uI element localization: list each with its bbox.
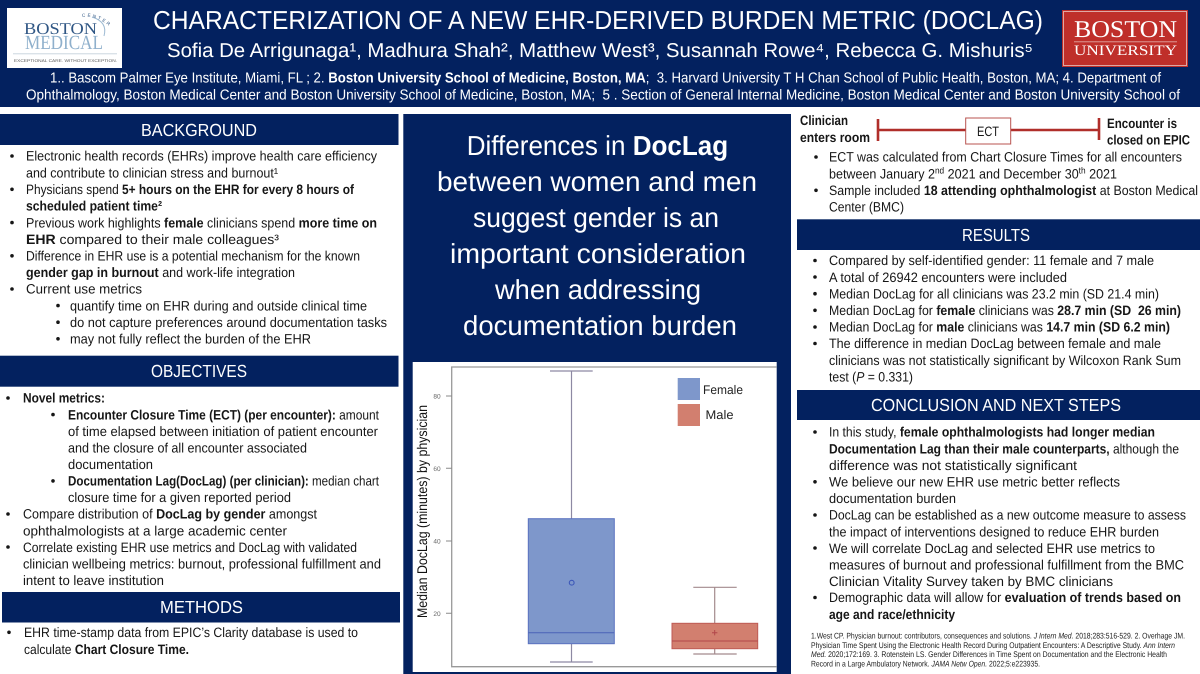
box: male	[672, 587, 758, 654]
text block: conclusion bullets: Documentation Lag than their male counterparts, although the	[829, 441, 1179, 456]
text block: conclusion bullets: We believe our new EHR use metric better reflects	[829, 474, 1120, 490]
y axis ticks and labels: 40	[433, 538, 441, 546]
diagram: encounter closure time: enters room	[800, 130, 870, 145]
diagram: encounter closure time: Encounter is	[1107, 116, 1177, 131]
text block: sample bullets: between January 2nd 2021 and December 30th 2021	[829, 165, 1117, 181]
text block: objectives bullets: ophthalmologists at a large academic center	[23, 523, 287, 538]
heading: background: BACKGROUND	[141, 120, 257, 140]
references: 1.West CP. Physician burnout: contributors, consequences and solutions. J Intern Med. 2018;283:516-529. 2. Overhage JM.	[811, 632, 1185, 640]
text block: results bullets: Median DocLag for male clinicians was 14.7 min (SD 6.2 min)	[829, 320, 1170, 335]
y axis ticks and labels: 20	[433, 611, 441, 618]
text block: background bullets: Physicians spend 5+ hours on the EHR for every 8 hours of	[26, 182, 354, 197]
text block: conclusion bullets: documentation burden	[829, 491, 956, 506]
panel: ECT diagram and sample	[800, 113, 1198, 215]
text block: conclusion bullets: age and race/ethnicity	[829, 607, 955, 622]
heading: background	[0, 114, 398, 145]
heading: conclusion and next steps	[797, 390, 1200, 420]
text block: background bullets: quantify time on EHR during and outside clinical time	[70, 298, 367, 313]
panel: conclusion and next steps	[797, 390, 1200, 622]
affiliations: 1.. Bascom Palmer Eye Institute, Miami, FL ; 2. Boston University School of Medicine, Boston, MA; 3. Harvard University T H Chan School of Public Health, Boston, MA; 4. Department of	[50, 70, 1162, 86]
legend: Female	[703, 383, 743, 397]
text block: background bullets: scheduled patient time²	[26, 199, 162, 214]
heading: results: RESULTS	[962, 225, 1030, 245]
text block: conclusion bullets: the impact of interventions designed to reduce EHR burden	[829, 524, 1159, 539]
text block: conclusion bullets: We will correlate DocLag and selected EHR use metrics to	[829, 541, 1155, 556]
text block: conclusion bullets: measures of burnout and professional fulfillment from the BMC	[829, 558, 1184, 572]
text block: objectives bullets	[6, 391, 381, 588]
logo: Boston Medical Center	[7, 8, 122, 68]
key message: important consideration	[450, 238, 746, 269]
authors: Sofia De Arrigunaga¹, Madhura Shah², Matthew West³, Susannah Rowe⁴, Rebecca G. Mishuris⁵	[167, 40, 1033, 62]
logo: Boston University: BOSTON	[1074, 17, 1177, 43]
diagram: encounter closure time: Clinician	[800, 113, 848, 128]
y axis title: Median DocLag (minutes) by physician	[414, 405, 430, 618]
text block: methods bullet	[7, 625, 358, 657]
logo: Boston Medical Center: EXCEPTIONAL CARE. WITHOUT EXCEPTION.	[14, 58, 117, 63]
references: Physician Time Spent Using the Electronic Health Record During Outpatient Encounters: A Descriptive Study. Ann Intern	[811, 641, 1175, 650]
logo: Boston Medical Center: BOSTON	[24, 19, 97, 38]
affiliations	[26, 70, 1181, 104]
panel: methods	[2, 592, 400, 657]
text block: results bullets: Compared by self-identified gender: 11 female and 7 male	[829, 253, 1154, 268]
diagram: encounter closure time: ECT	[977, 124, 999, 139]
text block: objectives bullets: Compare distribution of DocLag by gender amongst	[23, 507, 317, 522]
text block: sample bullets: Sample included 18 attending ophthalmologist at Boston Medical	[829, 183, 1198, 198]
key message: Differences in DocLag	[467, 130, 728, 161]
text block: results bullets: Median DocLag for female clinicians was 28.7 min (SD 26 min)	[829, 303, 1181, 318]
axis frame	[452, 367, 777, 667]
legend	[678, 378, 743, 426]
legend: Male	[706, 408, 734, 422]
box plot chart	[413, 362, 777, 672]
logo: Boston Medical Center: MEDICAL	[25, 32, 103, 54]
text block: background bullets: Difference in EHR use is a potential mechanism for the known	[26, 248, 360, 264]
text block: objectives bullets: Documentation Lag(DocLag) (per clinician): median chart	[68, 474, 379, 489]
text block: objectives bullets: intent to leave institution	[23, 573, 164, 588]
text block: methods bullet: EHR time-stamp data from EPIC’s Clarity database is used to	[24, 625, 358, 640]
heading: results	[797, 219, 1200, 250]
text block: results bullets: Median DocLag for all clinicians was 23.2 min (SD 21.4 min)	[829, 286, 1159, 301]
panel: results	[797, 219, 1200, 384]
text block: objectives bullets: and the closure of all encounter associated	[68, 440, 307, 456]
text block: background bullets	[10, 149, 387, 346]
text block: results bullets: test (P = 0.331)	[829, 369, 913, 384]
title: CHARACTERIZATION OF A NEW EHR-DERIVED BURDEN METRIC (DOCLAG)	[153, 5, 1043, 35]
text block: sample bullets: Center (BMC)	[829, 200, 904, 215]
panel: key message and chart	[403, 114, 791, 674]
logo: Boston Medical Center: CENTER	[82, 14, 110, 26]
text block: objectives bullets: of time elapsed between initiation of patient encounter	[68, 424, 378, 439]
text block: background bullets: Electronic health records (EHRs) improve health care efficiency	[26, 149, 377, 164]
text block: conclusion bullets	[813, 425, 1186, 622]
text block: objectives bullets: Novel metrics:	[23, 391, 105, 406]
y axis ticks and labels	[433, 394, 452, 618]
text block: objectives bullets: Correlate existing EHR use metrics and DocLag with validated	[23, 540, 357, 555]
text block: background bullets: Previous work highlights female clinicians spend more time on	[26, 215, 377, 230]
key message: when addressing	[494, 274, 701, 305]
text block: conclusion bullets: difference was not statistically significant	[829, 458, 1077, 473]
diagram: encounter closure time	[800, 113, 1190, 148]
text block: sample bullets	[814, 150, 1198, 215]
references: Record in a Large Ambulatory Network. JAMA Netw Open. 2022;5:e223935.	[811, 659, 1040, 668]
text block: results bullets	[813, 253, 1181, 384]
panel: background	[0, 114, 398, 346]
heading: methods	[2, 592, 400, 622]
text block: objectives bullets: Encounter Closure Time (ECT) (per encounter): amount	[68, 407, 379, 422]
text block: background bullets: do not capture preferences around documentation tasks	[70, 315, 387, 330]
logo: Boston University	[1062, 10, 1188, 67]
y axis ticks and labels: 60	[433, 466, 441, 473]
heading: objectives	[0, 356, 398, 387]
heading: conclusion and next steps: CONCLUSION AND NEXT STEPS	[871, 395, 1121, 415]
key message: suggest gender is an	[473, 202, 719, 233]
box: female	[528, 371, 614, 662]
text block: conclusion bullets: In this study, female ophthalmologists had longer median	[829, 425, 1155, 440]
text block: background bullets: may not fully reflect the burden of the EHR	[70, 332, 311, 346]
panel: objectives	[0, 356, 398, 588]
header banner	[0, 0, 1200, 107]
text block: conclusion bullets: Clinician Vitality Survey taken by BMC clinicians	[829, 574, 1113, 589]
text block: background bullets: EHR compared to their male colleagues³	[26, 232, 279, 247]
text block: results bullets: The difference in median DocLag between female and male	[829, 336, 1161, 351]
text block: background bullets: and contribute to clinician stress and burnout¹	[26, 165, 278, 180]
key message: documentation burden	[463, 310, 737, 341]
text block: results bullets: A total of 26942 encounters were included	[829, 270, 1067, 285]
key message: between women and men	[437, 166, 757, 197]
text block: objectives bullets: clinician wellbeing metrics: burnout, professional fulfillment and	[23, 556, 381, 572]
heading: methods: METHODS	[160, 597, 243, 617]
key message	[437, 130, 757, 341]
y axis ticks and labels: 80	[433, 394, 441, 400]
logo: Boston University: UNIVERSITY	[1074, 43, 1178, 59]
references	[811, 632, 1185, 668]
text block: conclusion bullets: Demographic data will allow for evaluation of trends based on	[829, 590, 1181, 605]
text block: background bullets: gender gap in burnout and work-life integration	[26, 265, 295, 280]
heading: objectives: OBJECTIVES	[151, 361, 247, 381]
text block: methods bullet: calculate Chart Closure Time.	[24, 642, 189, 657]
text block: background bullets: Current use metrics	[26, 282, 142, 297]
text block: objectives bullets: closure time for a given reported period	[68, 490, 291, 505]
text block: objectives bullets: documentation	[68, 457, 153, 472]
